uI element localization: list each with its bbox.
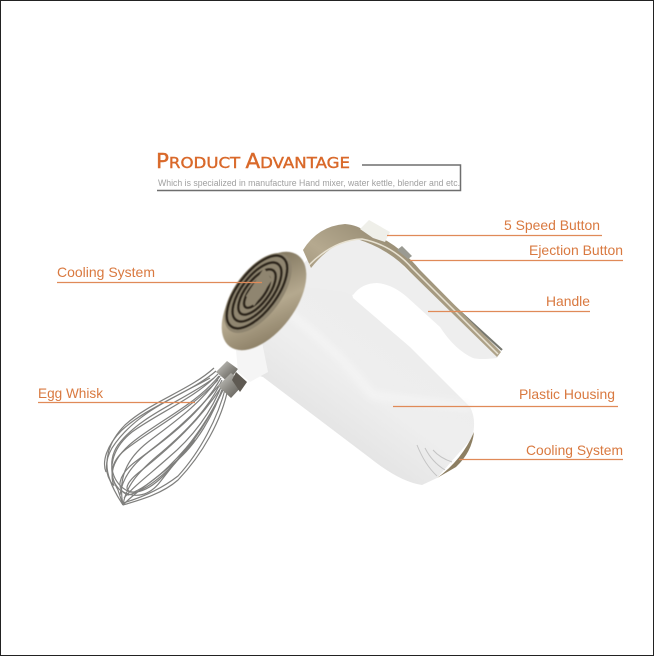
label: cooling system right: Cooling System xyxy=(526,442,623,458)
mixer body: plastic housing xyxy=(238,270,474,485)
subtitle: Which is specialized in manufacture Hand mixer, water kettle, blender and etc. xyxy=(158,178,460,188)
callout labels xyxy=(38,217,623,458)
egg whisk xyxy=(105,368,228,505)
handle dark outer edge xyxy=(400,256,502,350)
rear vent: cooling system xyxy=(417,432,474,478)
heading block xyxy=(156,149,460,190)
label: 5 speed button: 5 Speed Button xyxy=(504,217,600,233)
vent rings center cap xyxy=(246,268,272,306)
5 speed button xyxy=(360,220,390,242)
top trim band xyxy=(303,224,501,357)
motor head disc xyxy=(205,237,323,365)
ejection button xyxy=(397,246,412,259)
handle xyxy=(295,238,500,359)
title bracket xyxy=(157,165,460,190)
title: PRODUCT ADVANTAGE xyxy=(156,149,350,173)
trim highlight xyxy=(309,239,498,354)
vent rings xyxy=(216,246,298,338)
label: plastic housing: Plastic Housing xyxy=(519,386,615,402)
disc rim xyxy=(205,237,323,365)
label: cooling system left: Cooling System xyxy=(57,264,155,280)
body fold shading xyxy=(285,310,470,407)
disc face xyxy=(211,242,305,344)
label: egg whisk: Egg Whisk xyxy=(38,385,104,401)
whisk collars xyxy=(216,361,247,398)
label: handle: Handle xyxy=(546,293,590,309)
callout lines xyxy=(38,236,623,460)
nozzle under head xyxy=(236,342,268,382)
label: ejection button: Ejection Button xyxy=(529,242,623,258)
